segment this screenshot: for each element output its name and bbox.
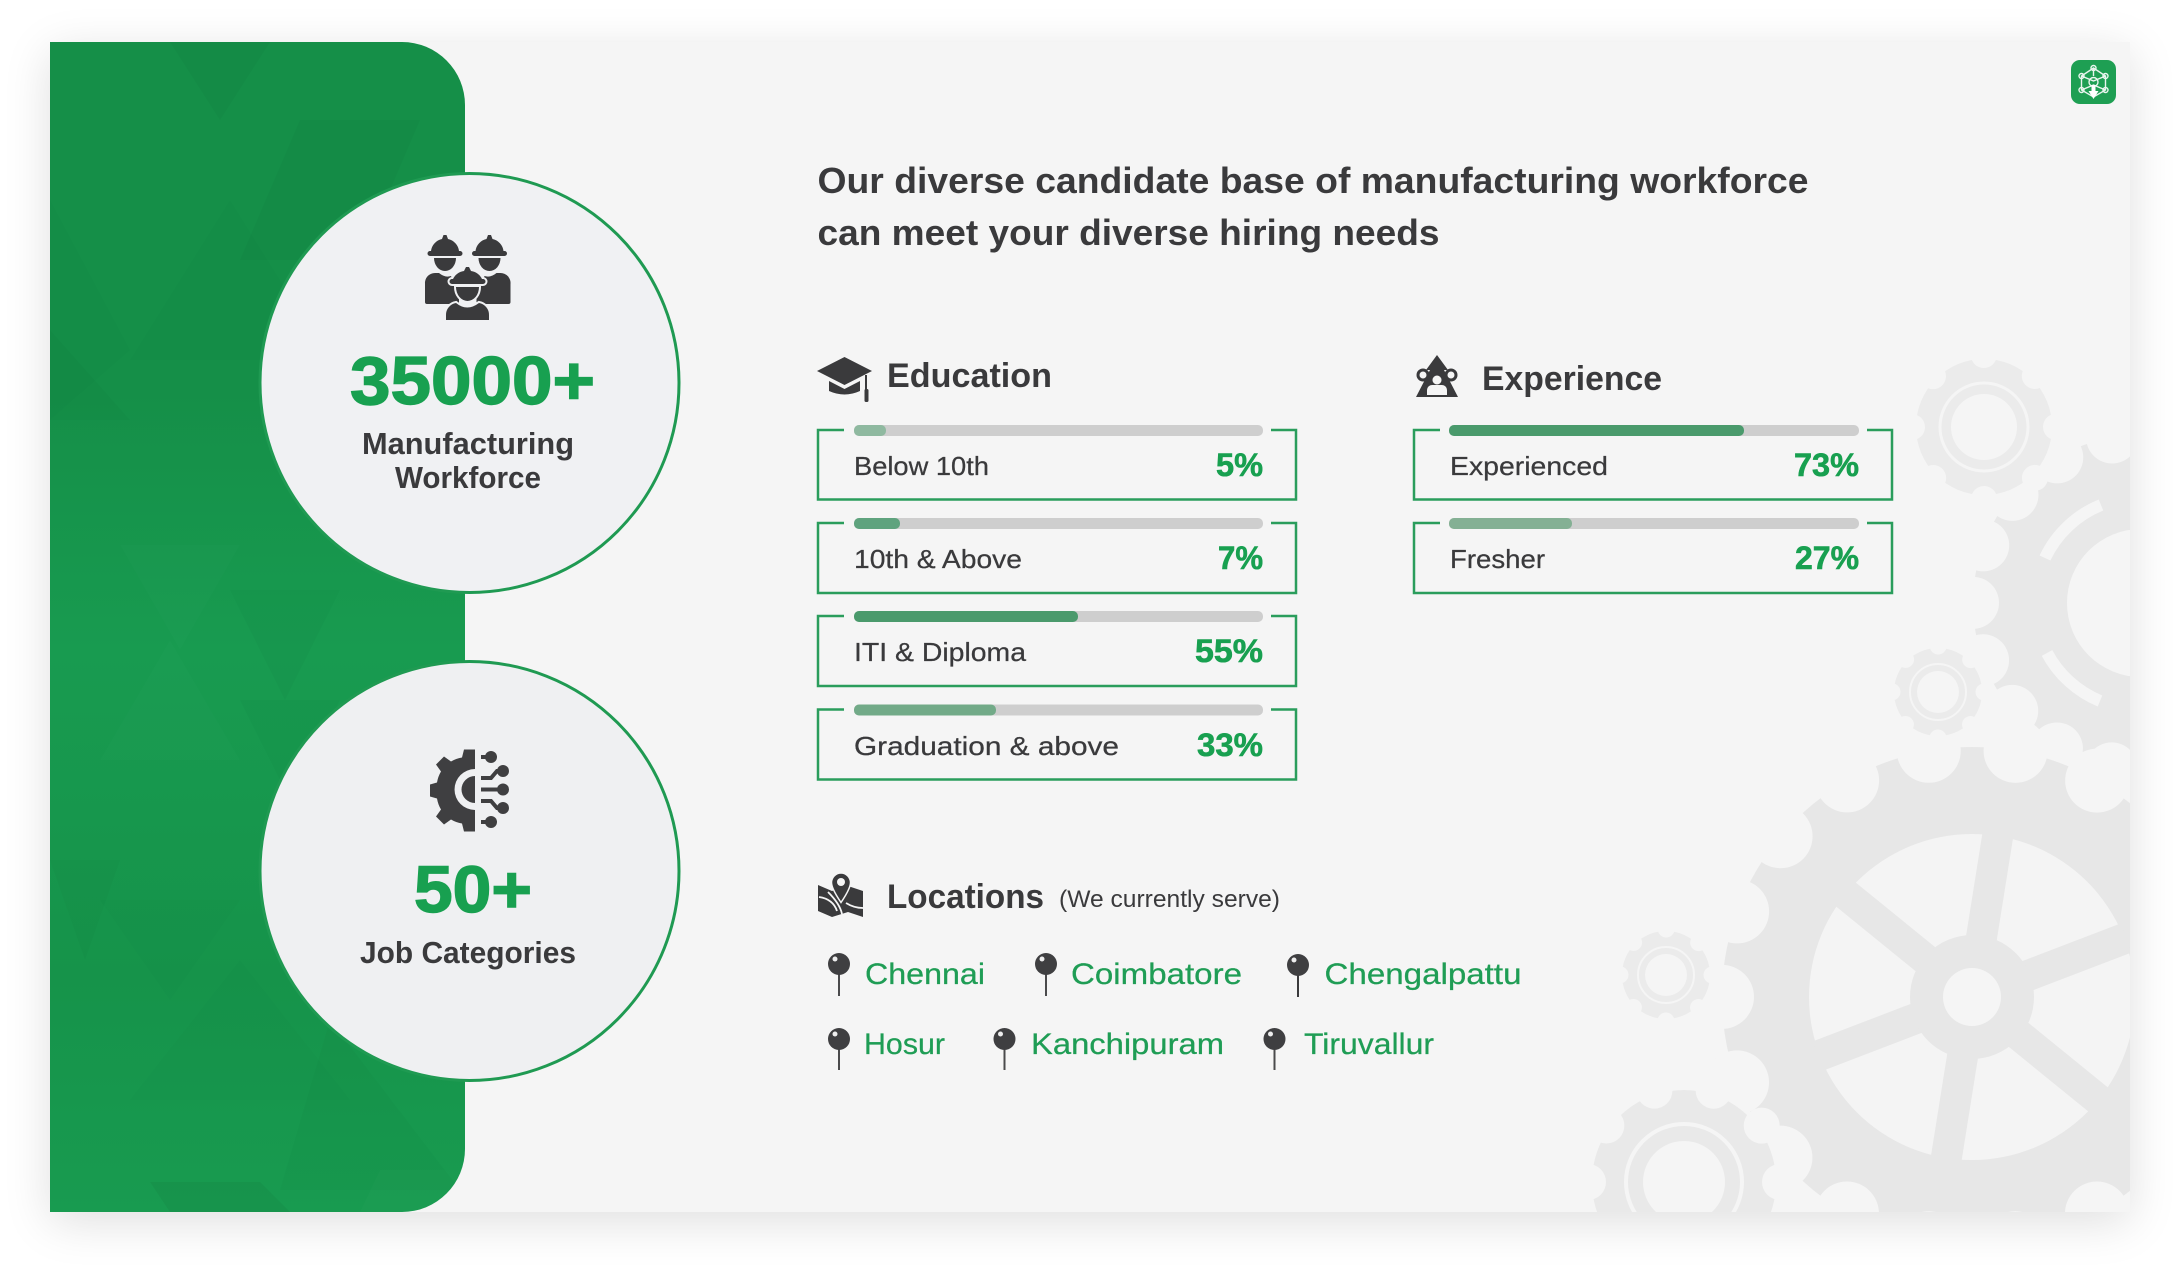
- row: below 10th: 5%: [1216, 447, 1263, 483]
- row: 10th and above: 10th & Above: [854, 544, 1022, 574]
- heading: locations: Locations: [887, 878, 1044, 916]
- row: graduation and above: [818, 704, 1296, 780]
- row: ITI and diploma: ITI & Diploma: [854, 637, 1027, 667]
- heading: [818, 160, 1808, 253]
- heading: education: Education: [887, 357, 1052, 395]
- location: Coimbatore: [1035, 953, 1242, 996]
- icon: gear circuit: [430, 750, 509, 832]
- stat: 50+: 50+: [414, 852, 532, 926]
- panel: green sidebar: [50, 42, 470, 1212]
- circle: manufacturing workforce: [260, 174, 679, 592]
- row: fresher: Fresher: [1450, 544, 1545, 574]
- heading: experience: Experience: [1482, 360, 1662, 398]
- location: Tiruvallur: [1264, 1028, 1434, 1070]
- icon: graduation cap: [817, 357, 872, 402]
- row: experienced: [1414, 425, 1892, 500]
- label: workforce: Workforce: [395, 460, 541, 495]
- heading line 1: Our diverse candidate base of manufacturing workforce: [818, 160, 1808, 201]
- location: Hosur: Hosur: [864, 1028, 945, 1061]
- location: Hosur: [828, 1028, 945, 1070]
- location: Chengalpattu: Chengalpattu: [1324, 958, 1522, 991]
- label: manufacturing: Manufacturing: [362, 426, 574, 461]
- icon: map: [818, 873, 863, 917]
- location: Coimbatore: Coimbatore: [1071, 958, 1242, 991]
- row: experienced: 73%: [1794, 447, 1859, 483]
- circle: job categories: [260, 662, 679, 1080]
- icon: experience: [1416, 355, 1458, 397]
- row: below 10th: Below 10th: [854, 451, 989, 481]
- location: Kanchipuram: Kanchipuram: [1031, 1028, 1224, 1061]
- gear: top small: [1918, 360, 2050, 494]
- row: graduation and above: 33%: [1197, 727, 1263, 763]
- gear: right large: [1975, 444, 2130, 752]
- logo: [2071, 60, 2116, 104]
- panel: education: [817, 357, 1296, 780]
- heading line 2: can meet your diverse hiring needs: [818, 212, 1440, 253]
- row: experienced: Experienced: [1450, 451, 1608, 481]
- location: Chengalpattu: [1287, 954, 1522, 997]
- panel: locations: [818, 873, 1522, 1070]
- note: we currently serve: (We currently serve): [1059, 886, 1280, 913]
- location: Chennai: [828, 953, 985, 996]
- location: Tiruvallur: Tiruvallur: [1304, 1028, 1434, 1061]
- background gears: [1594, 360, 2130, 1212]
- gear: middle small: [1895, 649, 1981, 735]
- location: Kanchipuram: [994, 1028, 1224, 1070]
- row: 10th and above: [818, 518, 1296, 593]
- gear: big main: [1724, 725, 2130, 1212]
- gear: lower small: [1623, 932, 1709, 1018]
- stat: 35000+: 35000+: [350, 343, 595, 419]
- row: ITI and diploma: [818, 611, 1296, 686]
- row: 10th and above: 7%: [1218, 540, 1263, 576]
- location: Chennai: Chennai: [865, 958, 985, 991]
- row: fresher: 27%: [1795, 540, 1859, 576]
- gear: bottom: [1594, 1090, 1780, 1212]
- panel: experience: [1414, 355, 1892, 593]
- row: below 10th: [818, 425, 1296, 500]
- row: ITI and diploma: 55%: [1195, 633, 1263, 669]
- row: graduation and above: Graduation & above: [854, 731, 1119, 761]
- icon: workers: [425, 235, 511, 320]
- row: fresher: [1414, 518, 1892, 593]
- label: job categories: Job Categories: [360, 935, 576, 970]
